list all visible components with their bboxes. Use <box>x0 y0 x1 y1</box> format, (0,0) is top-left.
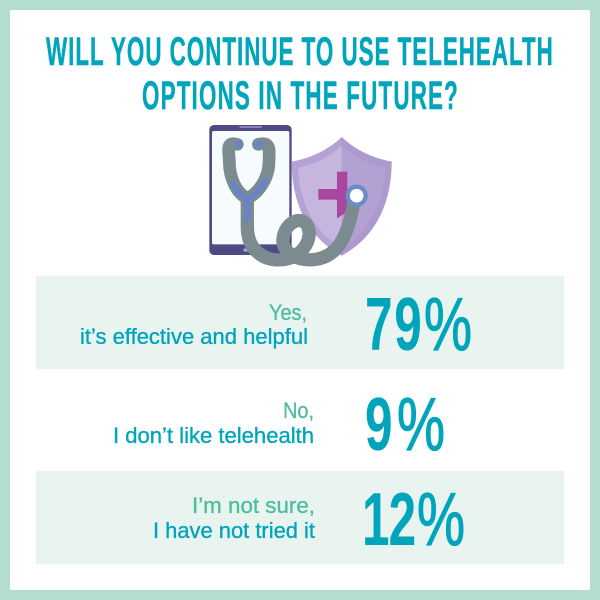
icon: stethoscope <box>229 141 366 260</box>
panel: no <box>113 382 445 467</box>
value: 9% <box>365 382 445 467</box>
label: not sure <box>153 493 315 543</box>
label: no <box>113 398 314 448</box>
value: 12%: % <box>417 477 465 561</box>
label: yes: Yes, <box>269 300 307 325</box>
value: 79% <box>365 282 472 367</box>
label: no: No, <box>283 398 314 423</box>
title: OPTIONS IN THE FUTURE? <box>142 73 458 118</box>
icon: shield <box>292 137 392 256</box>
label: yes <box>80 300 308 349</box>
title: WILL YOU CONTINUE TO USE TELEHEALTH <box>46 29 553 74</box>
panel: yes <box>36 276 564 369</box>
value: 79%: 79 <box>365 283 422 367</box>
icon: phone <box>209 125 292 255</box>
value: 12%: 12 <box>362 478 416 562</box>
icon: phone, shield and stethoscope <box>209 125 392 260</box>
label: not sure: I have not tried it <box>153 518 315 543</box>
label: yes: it’s effective and helpful <box>80 324 308 349</box>
title <box>46 29 553 118</box>
value: 79%: % <box>424 282 472 366</box>
panel: not sure <box>36 471 564 564</box>
icon: medical cross <box>318 172 357 218</box>
value: 12% <box>362 477 465 562</box>
value: 9%: % <box>397 382 445 466</box>
label: not sure: I’m not sure, <box>192 493 315 518</box>
value: 9%: 9 <box>365 383 393 467</box>
label: no: I don’t like telehealth <box>113 423 314 448</box>
